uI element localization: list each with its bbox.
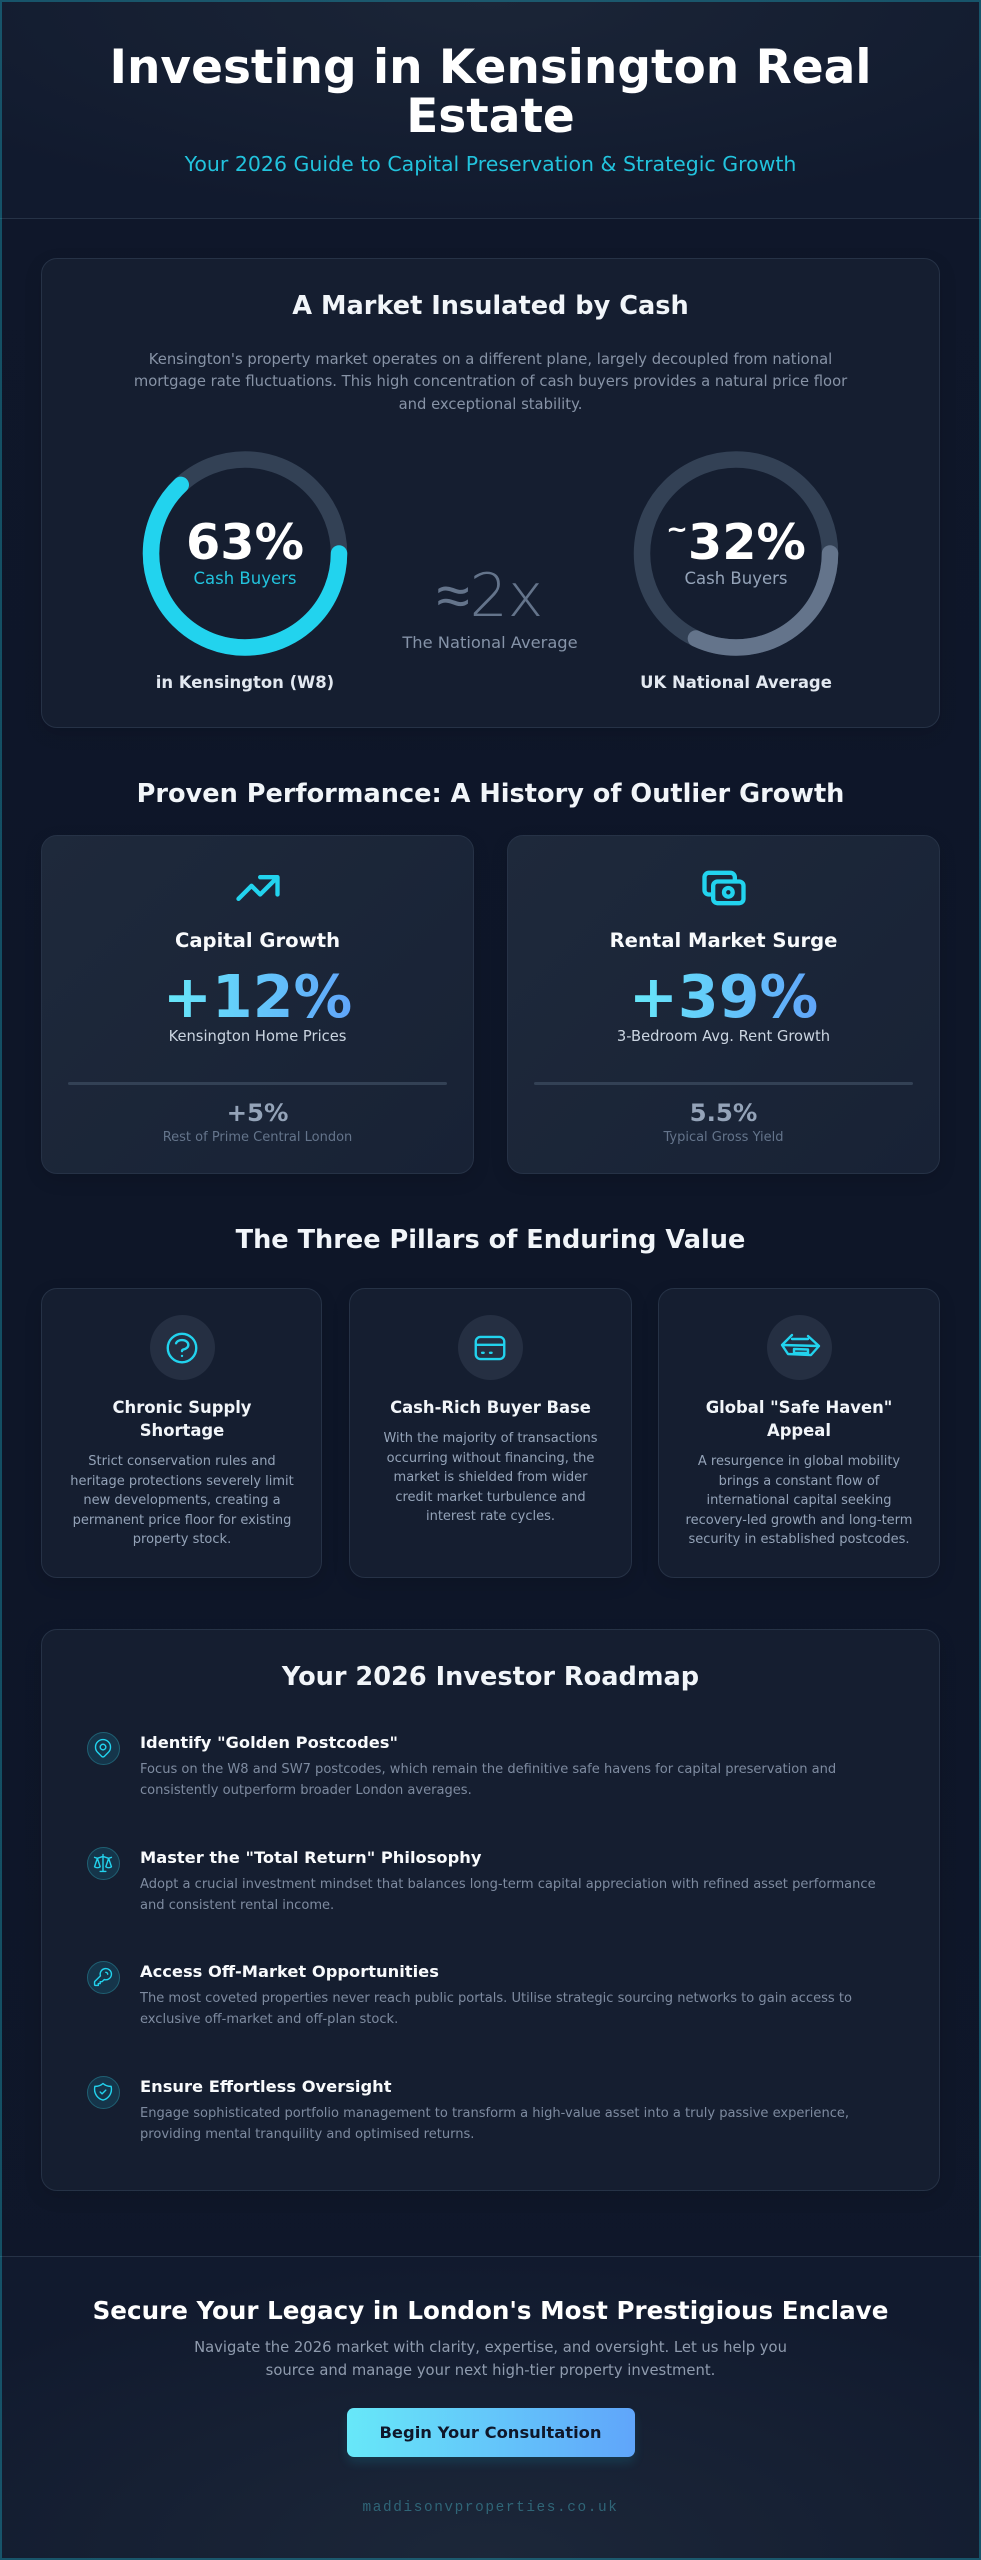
step 2 (87, 1847, 876, 1913)
button (346, 2408, 634, 2457)
icon: shield (87, 2076, 120, 2108)
heading: proven performance: Proven Performance: A History of Outlier Growth (137, 779, 844, 809)
pillar text: With the majority of transactions (383, 1431, 598, 1446)
icon: question (150, 1315, 214, 1380)
step text (140, 1991, 852, 2027)
intro paragraph (134, 350, 848, 413)
caption: UK National Average (640, 673, 832, 692)
stat label: Kensington Home Prices (169, 1028, 346, 1045)
step text: consistently outperform broader London averages. (140, 1783, 472, 1798)
step 3 (87, 1961, 852, 2027)
pillar text: recovery-led growth and long-term (686, 1513, 912, 1528)
comparison label: Rest of Prime Central London (163, 1130, 352, 1145)
step text: The most coveted properties never reach public portals. Utilise strategic sourcing networks to gain access to (140, 1991, 852, 2006)
caption: in Kensington (W8) (156, 673, 334, 692)
multiplier caption: The National Average (402, 633, 578, 652)
call to action text (194, 2339, 787, 2379)
step title: Identify "Golden Postcodes" (140, 1733, 398, 1752)
icon: scales (87, 1846, 120, 1880)
pillar text: new developments, creating a (83, 1493, 281, 1508)
pillar text (383, 1431, 598, 1524)
donut: Kensington 63% (142, 451, 348, 692)
step text (140, 2106, 849, 2142)
step text (140, 1762, 836, 1798)
call to action text: Navigate the 2026 market with clarity, expertise, and oversight. Let us help you (194, 2339, 787, 2356)
card: rental market surge (507, 835, 940, 1174)
card title: Rental Market Surge (610, 929, 837, 952)
icon: exchange (766, 1315, 832, 1380)
heading: Your 2026 Investor Roadmap (282, 1662, 699, 1692)
stat: +39% (629, 963, 818, 1031)
ring chart (142, 451, 348, 656)
pillar title: Chronic Supply (112, 1398, 252, 1417)
title: Investing in Kensington Real (109, 40, 872, 94)
pillar text: A resurgence in global mobility (698, 1454, 900, 1469)
pillar: global safe haven appeal (658, 1288, 940, 1578)
pillar text: heritage protections severely limit (70, 1474, 294, 1489)
call to action title: Secure Your Legacy in London's Most Prestigious Enclave (93, 2296, 888, 2325)
step title: Master the "Total Return" Philosophy (140, 1848, 481, 1866)
pillar text: property stock. (133, 1532, 231, 1547)
stat: +12% (163, 963, 352, 1031)
multiplier: ≈2x (437, 561, 543, 631)
pillar text: security in established postcodes. (688, 1532, 910, 1547)
pillar text (686, 1454, 912, 1547)
panel: investor roadmap (41, 1629, 940, 2190)
heading: three pillars: The Three Pillars of Enduring Value (236, 1225, 745, 1255)
intro paragraph: Kensington's property market operates on a different plane, largely decoupled from national (149, 350, 832, 368)
step text: and consistent rental income. (140, 1898, 334, 1913)
comparison stat: 5.5% (690, 1098, 757, 1127)
step text: providing mental tranquility and optimised returns. (140, 2127, 474, 2142)
pillar: chronic supply shortage (41, 1288, 322, 1578)
call to action text: source and manage your next high-tier property investment. (266, 2362, 715, 2379)
ring chart (634, 451, 838, 656)
step text: Adopt a crucial investment mindset that balances long-term capital appreciation with refined asset performance (140, 1876, 876, 1892)
step 1 (87, 1732, 836, 1798)
pillar title: Shortage (140, 1421, 224, 1440)
icon: key (87, 1961, 120, 1994)
pillar text: credit market turbulence and (395, 1490, 586, 1505)
step text (140, 1876, 876, 1913)
value: 63% (186, 513, 304, 571)
step title: Access Off-Market Opportunities (140, 1962, 439, 1981)
heading: A Market Insulated by Cash (292, 291, 689, 321)
step text: exclusive off-market and off-plan stock. (140, 2012, 398, 2027)
icon: location pin (87, 1732, 120, 1765)
pillar text: market is shielded from wider (394, 1470, 587, 1485)
pillar text: international capital seeking (706, 1493, 892, 1508)
step 4 (87, 2076, 849, 2142)
step text: Engage sophisticated portfolio management to transform a high-value asset into a truly passive experience, (140, 2106, 849, 2120)
title: Estate (406, 88, 575, 144)
intro paragraph: mortgage rate fluctuations. This high concentration of cash buyers provides a natural price floor (134, 373, 847, 390)
subtitle: Your 2026 Guide to Capital Preservation & Strategic Growth (185, 152, 796, 176)
pillar text: permanent price floor for existing (73, 1513, 291, 1528)
pillar title: Global "Safe Haven" (706, 1398, 892, 1417)
pillar title (706, 1398, 892, 1440)
card title: Capital Growth (175, 929, 340, 952)
sublabel: Cash Buyers (193, 569, 296, 588)
footer band (0, 2256, 981, 2560)
pillar title: Appeal (767, 1421, 831, 1440)
icon: cash (702, 870, 746, 906)
sublabel: Cash Buyers (684, 569, 788, 588)
stat label: 3-Bedroom Avg. Rent Growth (617, 1028, 830, 1045)
icon: credit card (458, 1315, 522, 1380)
panel: market insulated by cash (41, 258, 940, 728)
card: capital growth (41, 835, 474, 1174)
pillar text: interest rate cycles. (426, 1509, 555, 1524)
donut: UK 32% (634, 451, 838, 692)
comparison label: Typical Gross Yield (663, 1130, 784, 1145)
pillar text: Strict conservation rules and (88, 1454, 276, 1469)
button: Begin Your Consultation (379, 2423, 602, 2442)
pillar: cash-rich buyer base (349, 1288, 632, 1578)
comparison stat: +5% (227, 1098, 288, 1127)
pillar text: brings a constant flow of (719, 1474, 879, 1489)
title (109, 40, 872, 144)
header band (0, 0, 981, 219)
value: ~32% (666, 513, 806, 571)
pillar text: occurring without financing, the (387, 1451, 594, 1466)
comparison: about double (402, 561, 578, 652)
step title: Ensure Effortless Oversight (140, 2076, 392, 2096)
pillar text (70, 1454, 294, 1547)
pillar title: Cash-Rich Buyer Base (390, 1398, 591, 1417)
pillar title (112, 1398, 252, 1440)
website url: maddisonvproperties.co.uk (363, 2500, 618, 2516)
step text: Focus on the W8 and SW7 postcodes, which remain the definitive safe havens for capital preservation and (140, 1762, 836, 1777)
intro paragraph: and exceptional stability. (399, 396, 582, 413)
icon: trending up (236, 875, 280, 901)
